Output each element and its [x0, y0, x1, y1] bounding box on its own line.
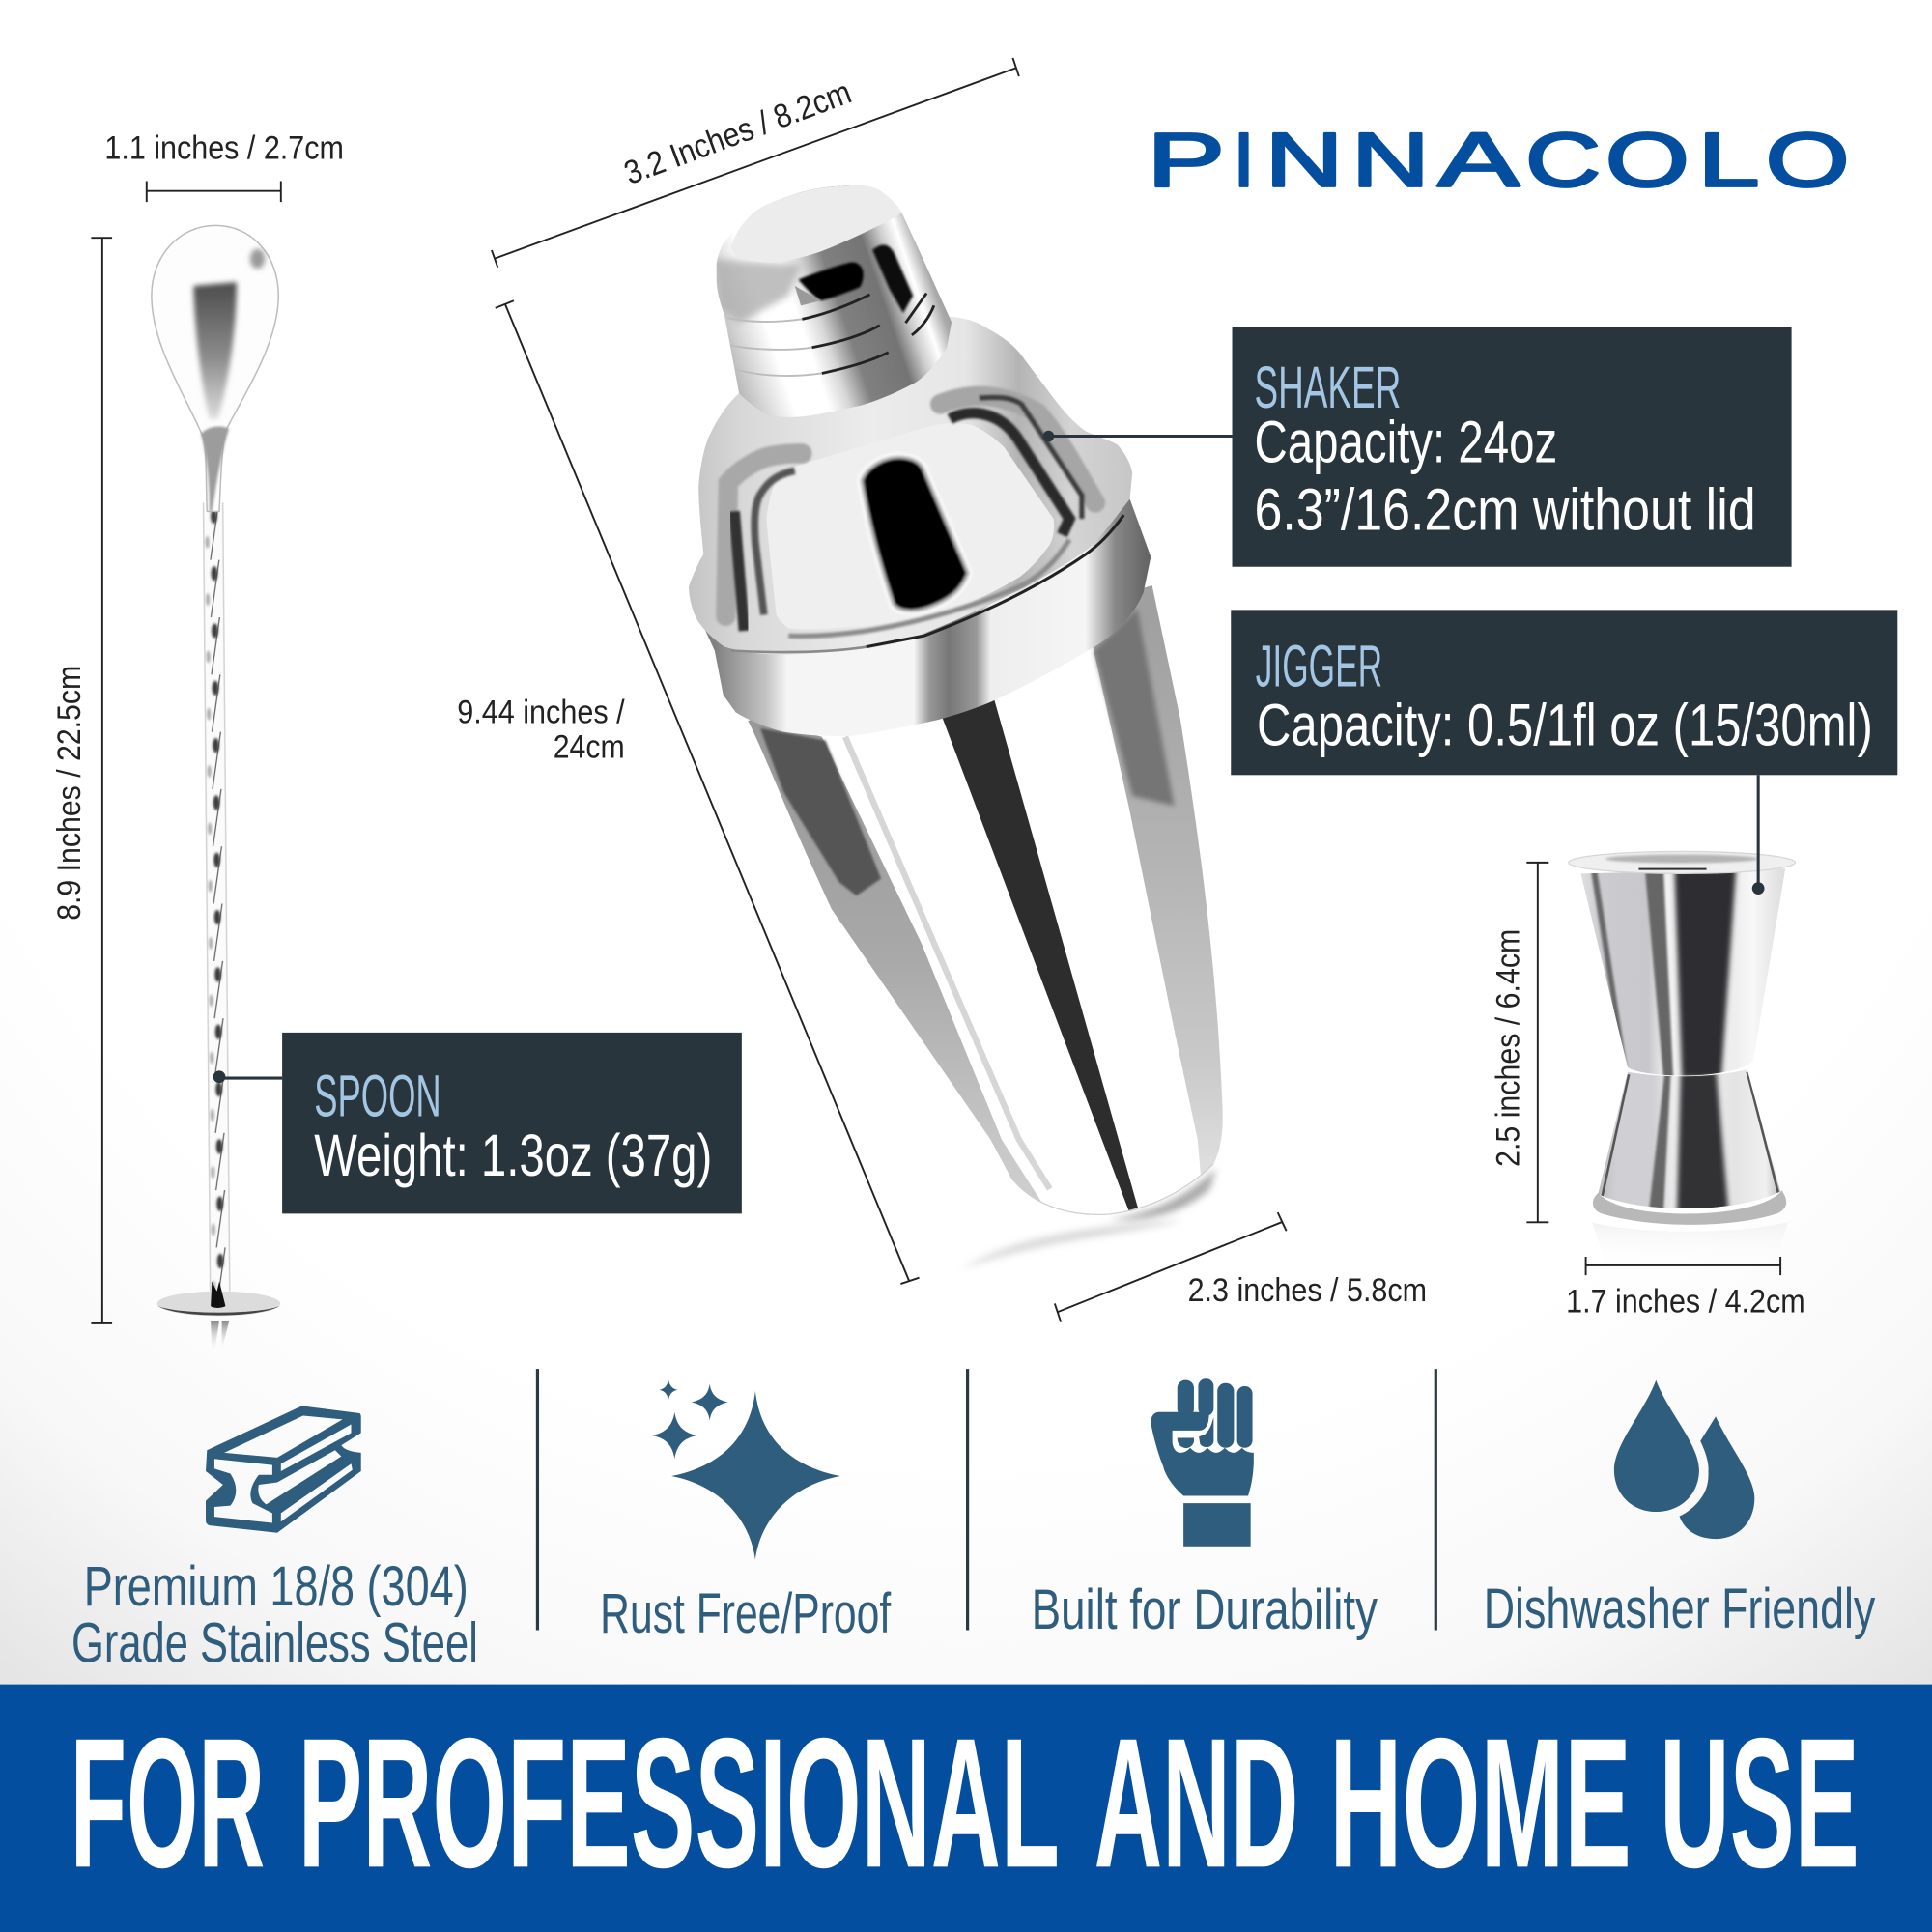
brand logo: PINNACOLO: P	[1148, 117, 1225, 203]
feature: rust free	[600, 1380, 892, 1645]
callout: spoon: Weight: 1.3oz (37g)	[314, 1122, 712, 1188]
brand logo: PINNACOLO	[1148, 117, 1850, 203]
footer banner: FOR	[71, 1699, 265, 1906]
divider 3	[1435, 1369, 1437, 1631]
feature: durability	[1032, 1378, 1378, 1641]
jigger rim	[1569, 851, 1795, 873]
brand logo: PINNACOLO: A	[1438, 117, 1520, 203]
icon: fist	[1151, 1378, 1254, 1547]
shaker width dimension	[492, 58, 1019, 268]
callout: spoon	[213, 1033, 742, 1213]
label: Rust Free/Proof	[600, 1582, 892, 1645]
shaker photo	[689, 185, 1233, 1269]
shaker body	[739, 579, 1233, 1220]
spoon height dimension: 8.9 Inches / 22.5cm	[51, 666, 88, 921]
jigger width dimension: 1.7 inches / 4.2cm	[1566, 1283, 1805, 1320]
spoon bowl	[152, 225, 278, 511]
callout: shaker	[1043, 327, 1792, 567]
spoon width dimension	[104, 130, 344, 202]
shaker shadow	[961, 1168, 1216, 1269]
brand logo: PINNACOLO: O	[1605, 117, 1690, 203]
callout: shaker: Capacity: 24oz	[1254, 409, 1557, 474]
brand logo: PINNACOLO: I	[1234, 117, 1254, 203]
brand logo: PINNACOLO: C	[1525, 117, 1601, 203]
callout: shaker: SHAKER	[1254, 355, 1401, 420]
jigger width dimension	[1566, 1257, 1805, 1320]
callout: shaker: 6.3”/16.2cm without lid	[1254, 476, 1756, 542]
jigger lower cone	[1598, 1069, 1780, 1213]
footer banner	[0, 1685, 1932, 1932]
divider 2	[966, 1369, 969, 1631]
footer banner: AND	[1094, 1699, 1298, 1906]
callout: jigger	[1231, 610, 1897, 895]
shaker height dimension	[457, 300, 920, 1284]
shaker base dimension: 2.3 inches / 5.8cm	[1188, 1272, 1427, 1309]
label	[71, 1555, 478, 1675]
divider 1	[536, 1369, 539, 1631]
callout: spoon: SPOON	[314, 1064, 441, 1129]
shaker collar band	[698, 499, 1151, 736]
jigger photo	[1569, 851, 1795, 1269]
shaker cap	[712, 185, 952, 417]
icon: water drops	[1614, 1380, 1754, 1539]
shaker dome inner reflection	[766, 423, 1054, 629]
spoon twisted handle	[203, 502, 231, 1292]
footer banner: PROFESSIONAL	[298, 1699, 1060, 1906]
spoon height dimension	[51, 238, 112, 1323]
feature: dishwasher	[1484, 1380, 1876, 1640]
brand logo: PINNACOLO: N	[1265, 117, 1343, 203]
shaker base dimension	[1055, 1212, 1427, 1322]
callout: jigger: JIGGER	[1256, 633, 1382, 698]
shaker dome	[689, 317, 1132, 655]
spoon base disc	[157, 1282, 280, 1353]
icon: steel beam	[206, 1406, 361, 1533]
spoon photo	[152, 225, 280, 1353]
jigger base ring	[1593, 1190, 1786, 1225]
label: Grade Stainless Steel	[71, 1612, 478, 1675]
jigger upper cone	[1580, 868, 1785, 1078]
icon: sparkles	[652, 1380, 840, 1560]
label: Built for Durability	[1032, 1578, 1378, 1641]
brand logo: PINNACOLO: N	[1351, 117, 1430, 203]
jigger reflection	[1592, 1222, 1788, 1269]
jigger height dimension	[1491, 863, 1548, 1222]
jigger height dimension: 2.5 inches / 6.4cm	[1491, 929, 1527, 1167]
shaker width dimension: 3.2 Inches / 8.2cm	[619, 74, 856, 192]
shaker dome black capsule	[860, 456, 970, 612]
shaker height dimension: 9.44 inches /	[457, 695, 625, 731]
shaker height dimension: 24cm	[554, 728, 625, 765]
brand logo: PINNACOLO: L	[1698, 117, 1759, 203]
label: Premium 18/8 (304)	[84, 1555, 469, 1618]
spoon width dimension: 1.1 inches / 2.7cm	[104, 130, 344, 167]
brand logo: PINNACOLO: O	[1766, 117, 1850, 203]
feature: stainless steel	[71, 1406, 478, 1675]
footer banner: HOME	[1329, 1699, 1632, 1906]
